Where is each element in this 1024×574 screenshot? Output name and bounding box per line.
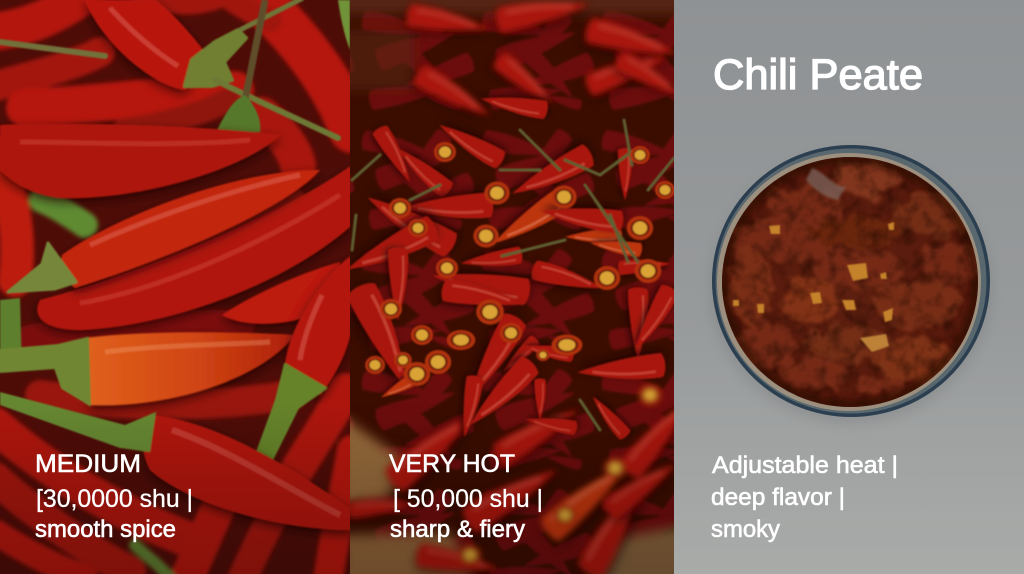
back layer chilies — [0, 0, 352, 574]
dark text shade — [0, 429, 350, 574]
shu value: medium: [30,0000 shu | — [36, 485, 193, 513]
chili paste texture — [720, 155, 982, 410]
front chilies and cut ends — [341, 90, 680, 441]
shu value: very hot: [ 50,000 shu | — [393, 485, 543, 513]
bowl shadow — [710, 152, 992, 424]
label: very hot — [389, 450, 543, 543]
note: smooth spice: smooth spice — [35, 516, 176, 543]
label: medium — [35, 450, 193, 543]
panel: chili paste — [674, 0, 1024, 574]
panel: medium chili — [0, 0, 352, 574]
description: chili paste: smoky — [711, 516, 780, 543]
note: sharp and fiery: sharp & fiery — [390, 516, 525, 543]
orange flecks — [733, 222, 894, 352]
bowl — [712, 145, 990, 417]
heading: very hot: VERY HOT — [389, 450, 515, 478]
description: chili paste: Adjustable heat | — [712, 452, 898, 479]
panel: very hot chili — [340, 0, 698, 574]
blurred wood board and top haze — [340, 0, 690, 574]
text shade — [350, 430, 674, 574]
title: Chili Peate — [713, 51, 923, 99]
heading: medium: MEDIUM — [35, 450, 141, 478]
description: chili paste: deep flavor | — [711, 484, 845, 511]
foreground chilies — [0, 0, 352, 530]
description: chili paste — [711, 452, 898, 543]
far chili layer — [347, 0, 698, 574]
dense chili pile — [340, 0, 684, 574]
